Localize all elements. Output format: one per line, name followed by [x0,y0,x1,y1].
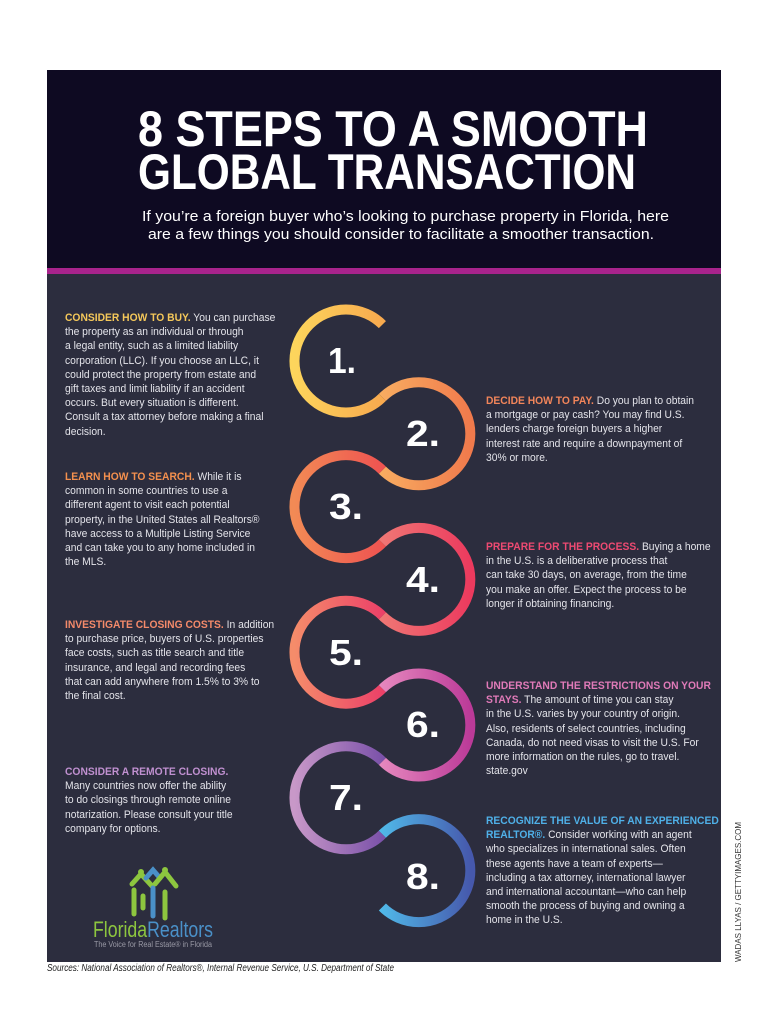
text: restrictions on stays: Also, residents of select countries, including [486,723,686,735]
text: learn how to search: the MLS. [65,556,106,568]
text: consider how to buy: the property as an individual or through [65,326,244,338]
title: 8 STEPS TO A SMOOTH [138,101,648,157]
text: consider how to buy [65,312,275,438]
sources: Sources: National Association of Realtors®, Internal Revenue Service, U.S. Department of State [47,963,394,974]
text: restrictions on stays: in the U.S. varies by your country of origin. [486,708,680,720]
text: investigate closing costs: to purchase price, buyers of U.S. properties [65,633,264,645]
background panel [47,70,721,962]
text: learn how to search [65,471,260,568]
step numbers: 7. [329,777,363,818]
step circles [294,309,470,922]
text: remote closing: company for options. [65,823,161,835]
text: decide how to pay [486,395,694,464]
step numbers [328,340,440,897]
title [138,101,648,200]
logo text: FloridaRealtors [93,917,213,942]
text: prepare for the process: you make an offer. Expect the process to be [486,584,687,596]
text: investigate closing costs: insurance, and legal and recording fees [65,662,245,674]
text: investigate closing costs: face costs, such as title search and title [65,647,244,659]
text: experienced realtor: these agents have a team of experts— [486,858,663,870]
text: restrictions on stays [486,680,711,777]
step numbers: 5. [329,632,363,673]
text: remote closing: to do closings through remote online [65,794,231,806]
text: investigate closing costs [65,619,274,702]
text: experienced realtor: and international accountant—who can help [486,886,686,898]
text: prepare for the process: in the U.S. is a deliberative process that [486,555,667,567]
subtitle: If you’re a foreign buyer who’s looking to purchase property in Florida, here [142,208,669,225]
logo icon: houses [132,867,176,918]
text: consider how to buy: occurs. But every situation is different. [65,397,239,409]
text: investigate closing costs: INVESTIGATE CLOSING COSTS. In addition [65,619,274,631]
text: experienced realtor: including a tax attorney, international lawyer [486,872,685,884]
logo text: The Voice for Real Estate® in Florida [94,940,212,949]
text: decide how to pay: 30% or more. [486,452,548,464]
text: learn how to search: common in some countries to use a [65,485,227,497]
text: consider how to buy: CONSIDER HOW TO BUY. You can purchase [65,312,275,324]
text: remote closing: notarization. Please consult your title [65,809,233,821]
text: experienced realtor: who specializes in international sales. Often [486,843,686,855]
text: prepare for the process: longer if obtaining financing. [486,598,614,610]
text: restrictions on stays: more information on the rules, go to travel. [486,751,679,763]
text: restrictions on stays: STAYS. The amount of time you can stay [486,694,673,706]
text: experienced realtor: smooth the process of buying and owning a [486,900,685,912]
text: investigate closing costs: that can add anywhere from 1.5% to 3% to [65,676,260,688]
text: learn how to search: and can take you to any home included in [65,542,255,554]
text: consider how to buy: gift taxes and limit liability if an accident [65,383,245,395]
subtitle: are a few things you should consider to facilitate a smoother transaction. [148,226,654,243]
text: prepare for the process: can take 30 days, on average, from the time [486,569,687,581]
step numbers: 1. [328,340,356,381]
text: restrictions on stays: state.gov [486,765,528,777]
text: consider how to buy: decision. [65,426,106,438]
step numbers: 2. [406,413,440,454]
text: consider how to buy: Consult a tax attorney before making a final [65,411,264,423]
text: consider how to buy: corporation (LLC). If you choose an LLC, it [65,355,259,367]
text: experienced realtor: REALTOR®. Consider working with an agent [486,829,692,841]
text: prepare for the process: PREPARE FOR THE PROCESS. Buying a home [486,541,711,553]
text: restrictions on stays: UNDERSTAND THE RESTRICTIONS ON YOUR [486,680,711,692]
text: restrictions on stays: Canada, do not need visas to visit the U.S. For [486,737,699,749]
header band [47,70,721,269]
text: remote closing: CONSIDER A REMOTE CLOSING. [65,766,228,778]
text: experienced realtor [486,815,719,926]
text: learn how to search: different agent to visit each potential [65,499,230,511]
text: consider how to buy: a legal entity, such as a limited liability [65,340,238,352]
text: experienced realtor: RECOGNIZE THE VALUE OF AN EXPERIENCED [486,815,719,827]
step numbers: 4. [406,559,440,600]
text: remote closing [65,766,233,835]
title: GLOBAL TRANSACTION [138,144,636,200]
step numbers: 8. [406,856,440,897]
text: learn how to search: have access to a Multiple Listing Service [65,528,250,540]
subtitle [142,208,669,243]
text: remote closing: Many countries now offer the ability [65,780,226,792]
text: decide how to pay: interest rate and require a downpayment of [486,438,682,450]
photo credit: WADAS LLYAS / GETTYIMAGES.COM [734,822,743,962]
text: decide how to pay: a mortgage or pay cash? You may find U.S. [486,409,685,421]
text: learn how to search: LEARN HOW TO SEARCH. While it is [65,471,242,483]
text: learn how to search: property, in the United States all Realtors® [65,514,259,526]
text: decide how to pay: DECIDE HOW TO PAY. Do you plan to obtain [486,395,694,407]
text: experienced realtor: home in the U.S. [486,914,563,926]
text: investigate closing costs: the final cost. [65,690,126,702]
text: consider how to buy: could protect the property from estate and [65,369,256,381]
step numbers: 3. [329,486,363,527]
text: decide how to pay: lenders charge foreign buyers a higher [486,423,662,435]
step numbers: 6. [406,704,440,745]
text: prepare for the process [486,541,711,610]
